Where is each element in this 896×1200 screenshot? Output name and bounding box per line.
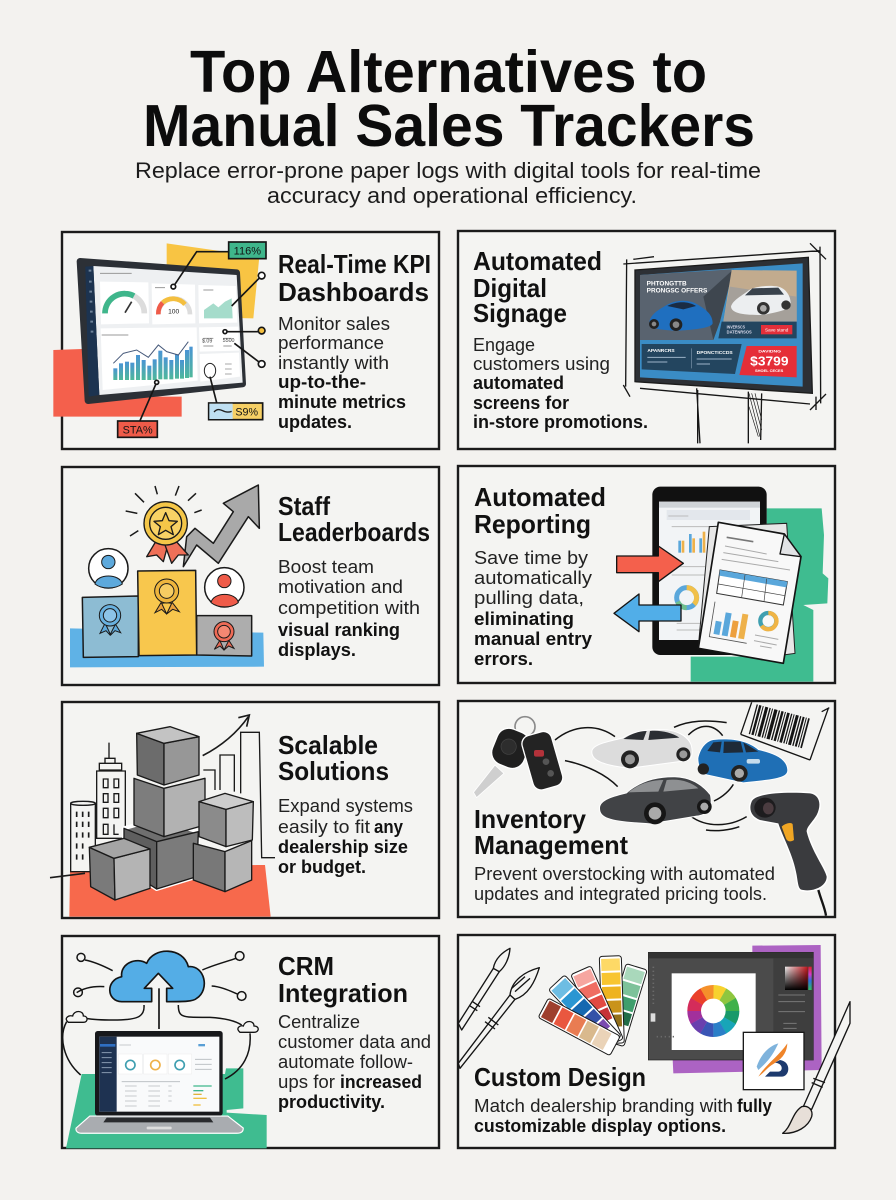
text: dashboards description: updates. xyxy=(278,411,352,432)
text: dashboards description: minute metrics xyxy=(278,391,406,412)
text: scalable description: easily to fit xyxy=(278,816,370,837)
illustration: digital sign with car offers: SHOEL CECES xyxy=(755,368,784,373)
heading: Automated Digital Signage: Automated xyxy=(473,246,602,276)
text: reporting description xyxy=(474,547,593,669)
illustration: digital sign with car offers: DAVIDNG xyxy=(758,349,781,354)
text: reporting description: automatically xyxy=(474,567,593,588)
text: reporting description: eliminating xyxy=(474,608,574,629)
icon: blue car xyxy=(698,739,787,782)
text: dashboards description: performance xyxy=(278,332,384,353)
text: reporting description: Save time by xyxy=(474,547,589,568)
chart: colour wheel xyxy=(687,985,740,1037)
illustration: digital sign with car offers: PRONGSC OFFERS xyxy=(647,288,707,294)
text: CRM description xyxy=(278,1011,431,1112)
text: leaderboards description: displays. xyxy=(278,639,356,660)
heading: CRM Integration xyxy=(278,951,408,1008)
heading: Real-Time KPI Dashboards: Dashboards xyxy=(278,277,429,307)
heading: Inventory Management xyxy=(474,804,628,860)
panel: inventory management xyxy=(458,701,835,917)
icon: swatch fan xyxy=(538,956,647,1056)
barcode xyxy=(749,704,810,748)
illustration: keys, cars, barcode and scanner xyxy=(474,702,829,916)
heading: Automated Reporting: Automated xyxy=(474,482,606,512)
illustration: tablet dashboard with callouts: 100 xyxy=(168,309,180,316)
illustration: cloud and laptop xyxy=(63,951,267,1148)
illustration: tablet dashboard with callouts: $.09 xyxy=(202,339,212,345)
title: Manual Sales Trackers xyxy=(143,93,755,159)
illustration: digital sign with car offers: APANRCRS xyxy=(647,348,675,353)
heading: Staff Leaderboards: Staff xyxy=(278,491,330,521)
text: reporting description: manual entry xyxy=(474,628,593,649)
panel: staff leaderboards xyxy=(62,467,439,685)
subtitle: accuracy and operational efficiency. xyxy=(267,183,637,208)
icon: dark car xyxy=(600,777,712,824)
illustration: digital sign with car offers: DATENRSOS xyxy=(727,330,752,335)
text: inventory description: updates and integrated pricing tools. xyxy=(474,883,767,904)
callout: S9%: S9% xyxy=(235,406,259,418)
heading: Scalable Solutions: Scalable xyxy=(278,730,378,760)
heading: Real-Time KPI Dashboards: Real-Time KPI xyxy=(278,249,431,279)
heading: Real-Time KPI Dashboards xyxy=(278,249,431,307)
text: CRM description: Centralize xyxy=(278,1011,360,1032)
text: CRM description: automate follow- xyxy=(278,1051,413,1072)
callout: STA%: STA% xyxy=(123,424,153,436)
heading: Scalable Solutions xyxy=(278,730,389,786)
text: dashboards description: instantly with xyxy=(278,352,389,373)
illustration: digital sign with car offers: Save stand xyxy=(765,327,789,332)
illustration: digital sign with car offers: $3799 xyxy=(750,355,788,369)
text: custom design description: customizable display options. xyxy=(474,1115,726,1136)
text: leaderboards description: visual ranking xyxy=(278,619,400,640)
text: CRM description: increased xyxy=(340,1071,422,1092)
heading: Automated Digital Signage: Digital xyxy=(473,273,547,303)
text: scalable description: any xyxy=(374,816,404,837)
heading: Inventory Management: Management xyxy=(474,830,628,860)
illustration: digital sign with car offers: PHTONGTTB xyxy=(647,282,687,288)
callout: STA% xyxy=(118,421,157,437)
text: scalable description xyxy=(278,795,413,877)
heading: Staff Leaderboards: Leaderboards xyxy=(278,517,430,547)
heading: Automated Reporting xyxy=(474,482,606,539)
text: inventory description: Prevent overstocking with automated xyxy=(474,863,775,884)
illustration: podium with medals and arrow xyxy=(70,485,264,667)
heading: Automated Digital Signage: Signage xyxy=(473,298,567,328)
text: inventory description xyxy=(474,863,775,904)
text: reporting description: pulling data, xyxy=(474,587,584,608)
title: Top Alternatives to xyxy=(190,39,707,105)
text: signage description: customers using xyxy=(473,353,610,374)
panel: automated digital signage xyxy=(458,231,835,449)
title xyxy=(143,39,755,159)
text: scalable description: dealership size xyxy=(278,836,408,857)
heading: Staff Leaderboards xyxy=(278,491,430,547)
text: custom design description xyxy=(474,1095,773,1136)
panel: CRM integration xyxy=(62,936,439,1148)
icon: car keys xyxy=(474,717,564,797)
text: custom design description: Match dealership branding with xyxy=(474,1095,733,1116)
text: dashboards description: up-to-the- xyxy=(278,371,366,392)
illustration: tablet, report and arrows xyxy=(614,487,828,682)
illustration: digital sign with car offers xyxy=(623,243,826,443)
panel: automated reporting xyxy=(458,466,835,683)
heading: Automated Reporting: Reporting xyxy=(474,509,591,539)
panel: real-time KPI dashboards xyxy=(53,232,439,449)
heading: CRM Integration: CRM xyxy=(278,951,334,981)
callout: S9% xyxy=(209,403,263,420)
illustration: digital sign with car offers: DPONCTICCDS xyxy=(697,350,733,355)
heading: Custom Design: Custom Design xyxy=(474,1062,646,1092)
icon: logo card xyxy=(743,1032,804,1090)
heading: CRM Integration: Integration xyxy=(278,978,408,1008)
text: signage description: in-store promotions. xyxy=(473,411,648,432)
illustration: stacked cubes and city xyxy=(50,715,275,917)
text: leaderboards description: motivation and xyxy=(278,576,403,597)
icon: barcode scanner xyxy=(750,793,827,916)
text: scalable description: Expand systems xyxy=(278,795,413,816)
text: custom design description: fully xyxy=(737,1095,773,1116)
illustration: digital sign with car offers: INVERSCS xyxy=(727,325,745,330)
text: signage description: automated xyxy=(473,372,564,393)
text: CRM description: ups for xyxy=(278,1071,335,1092)
text: scalable description: or budget. xyxy=(278,856,366,877)
subtitle: Replace error-prone paper logs with digital tools for real-time xyxy=(135,158,761,183)
panel: custom design xyxy=(458,935,850,1148)
heading: Scalable Solutions: Solutions xyxy=(278,756,389,786)
text: signage description: screens for xyxy=(473,392,569,413)
illustration: tablet dashboard with callouts: 5500 xyxy=(223,338,235,344)
text: signage description xyxy=(473,334,648,432)
panel: scalable solutions xyxy=(50,702,439,918)
heading: Automated Digital Signage xyxy=(473,246,602,328)
illustration: tablet dashboard with callouts xyxy=(53,242,266,437)
text: CRM description: productivity. xyxy=(278,1091,385,1112)
icon: paint brushes xyxy=(458,948,850,1133)
text: CRM description: customer data and xyxy=(278,1031,431,1052)
text: dashboards description: Monitor sales xyxy=(278,313,390,334)
callout: 116%: 116% xyxy=(234,245,262,257)
text: leaderboards description: competition with xyxy=(278,597,420,618)
icon: silver car xyxy=(592,730,692,768)
subtitle xyxy=(135,158,761,208)
text: leaderboards description xyxy=(278,556,420,660)
text: dashboards description xyxy=(278,313,406,432)
illustration: brushes, swatches and design software xyxy=(458,945,850,1133)
heading: Inventory Management: Inventory xyxy=(474,804,587,834)
text: signage description: Engage xyxy=(473,334,535,355)
text: leaderboards description: Boost team xyxy=(278,556,374,577)
text: reporting description: errors. xyxy=(474,648,533,669)
callout: 116% xyxy=(229,242,266,259)
